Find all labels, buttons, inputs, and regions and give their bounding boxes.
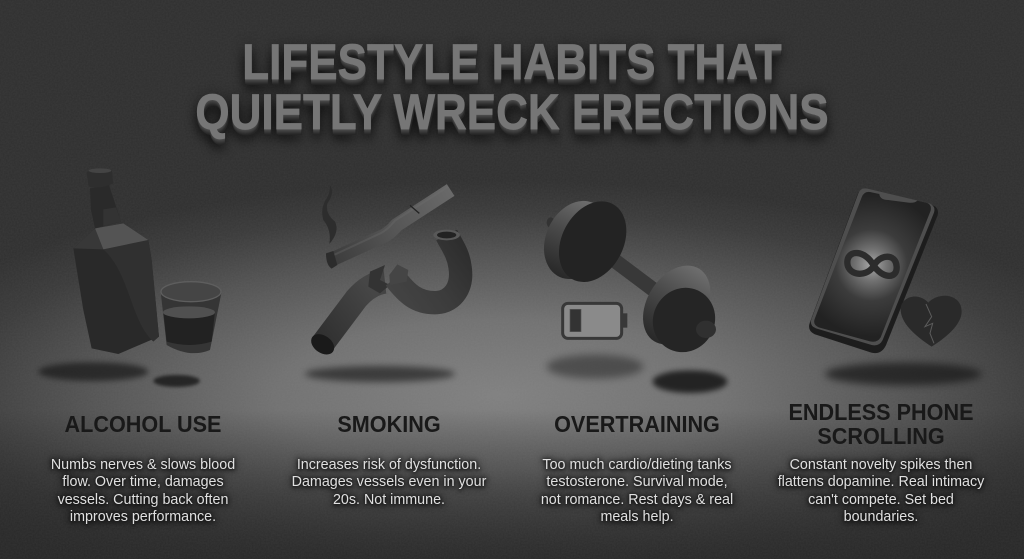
icon: cigarette and broken artery <box>304 184 472 386</box>
description: smoking <box>289 454 489 508</box>
description: alcohol use: improves performance. <box>70 509 216 525</box>
panel: overtraining <box>538 200 736 527</box>
heading: endless phone scrolling: SCROLLING <box>817 423 945 449</box>
description: endless phone scrolling: flattens dopamine. Real intimacy <box>778 474 984 490</box>
panel: smoking <box>289 184 489 508</box>
icon: phone with infinity symbol and broken heart <box>809 188 982 389</box>
description: overtraining: testosterone. Survival mode, <box>546 474 728 490</box>
heading: endless phone scrolling: ENDLESS PHONE <box>788 399 974 425</box>
icon: whisky bottle and glass <box>38 168 222 389</box>
heading: alcohol use: ALCOHOL USE <box>65 411 221 437</box>
description: overtraining: not romance. Rest days & real <box>541 492 733 508</box>
icon: dumbbell and low battery <box>544 200 730 396</box>
description: overtraining: Too much cardio/dieting tanks <box>542 457 732 473</box>
description: alcohol use: Numbs nerves & slows blood <box>51 457 235 473</box>
description: alcohol use: vessels. Cutting back often <box>58 492 228 508</box>
heading: overtraining: OVERTRAINING <box>554 411 720 437</box>
panel: endless phone scrolling <box>774 188 986 526</box>
heading: endless phone scrolling <box>788 399 974 449</box>
heading: smoking: SMOKING <box>337 411 441 437</box>
description: alcohol use: flow. Over time, damages <box>62 474 224 490</box>
description: smoking: Increases risk of dysfunction. <box>297 457 481 473</box>
description: overtraining: meals help. <box>600 509 674 525</box>
title: QUIETLY WRECK ERECTIONS <box>195 84 829 140</box>
description: endless phone scrolling: Constant novelty spikes then <box>790 457 972 473</box>
description: overtraining <box>538 454 736 527</box>
description: endless phone scrolling: can't compete. Set bed <box>808 492 954 508</box>
description: smoking: 20s. Not immune. <box>333 492 445 508</box>
title: LIFESTYLE HABITS THAT <box>242 34 782 90</box>
description: endless phone scrolling <box>774 454 986 526</box>
title <box>192 34 832 152</box>
description: smoking: Damages vessels even in your <box>292 474 486 490</box>
description: alcohol use <box>48 455 238 527</box>
description: endless phone scrolling: boundaries. <box>844 509 918 525</box>
panel: alcohol use <box>38 168 238 527</box>
